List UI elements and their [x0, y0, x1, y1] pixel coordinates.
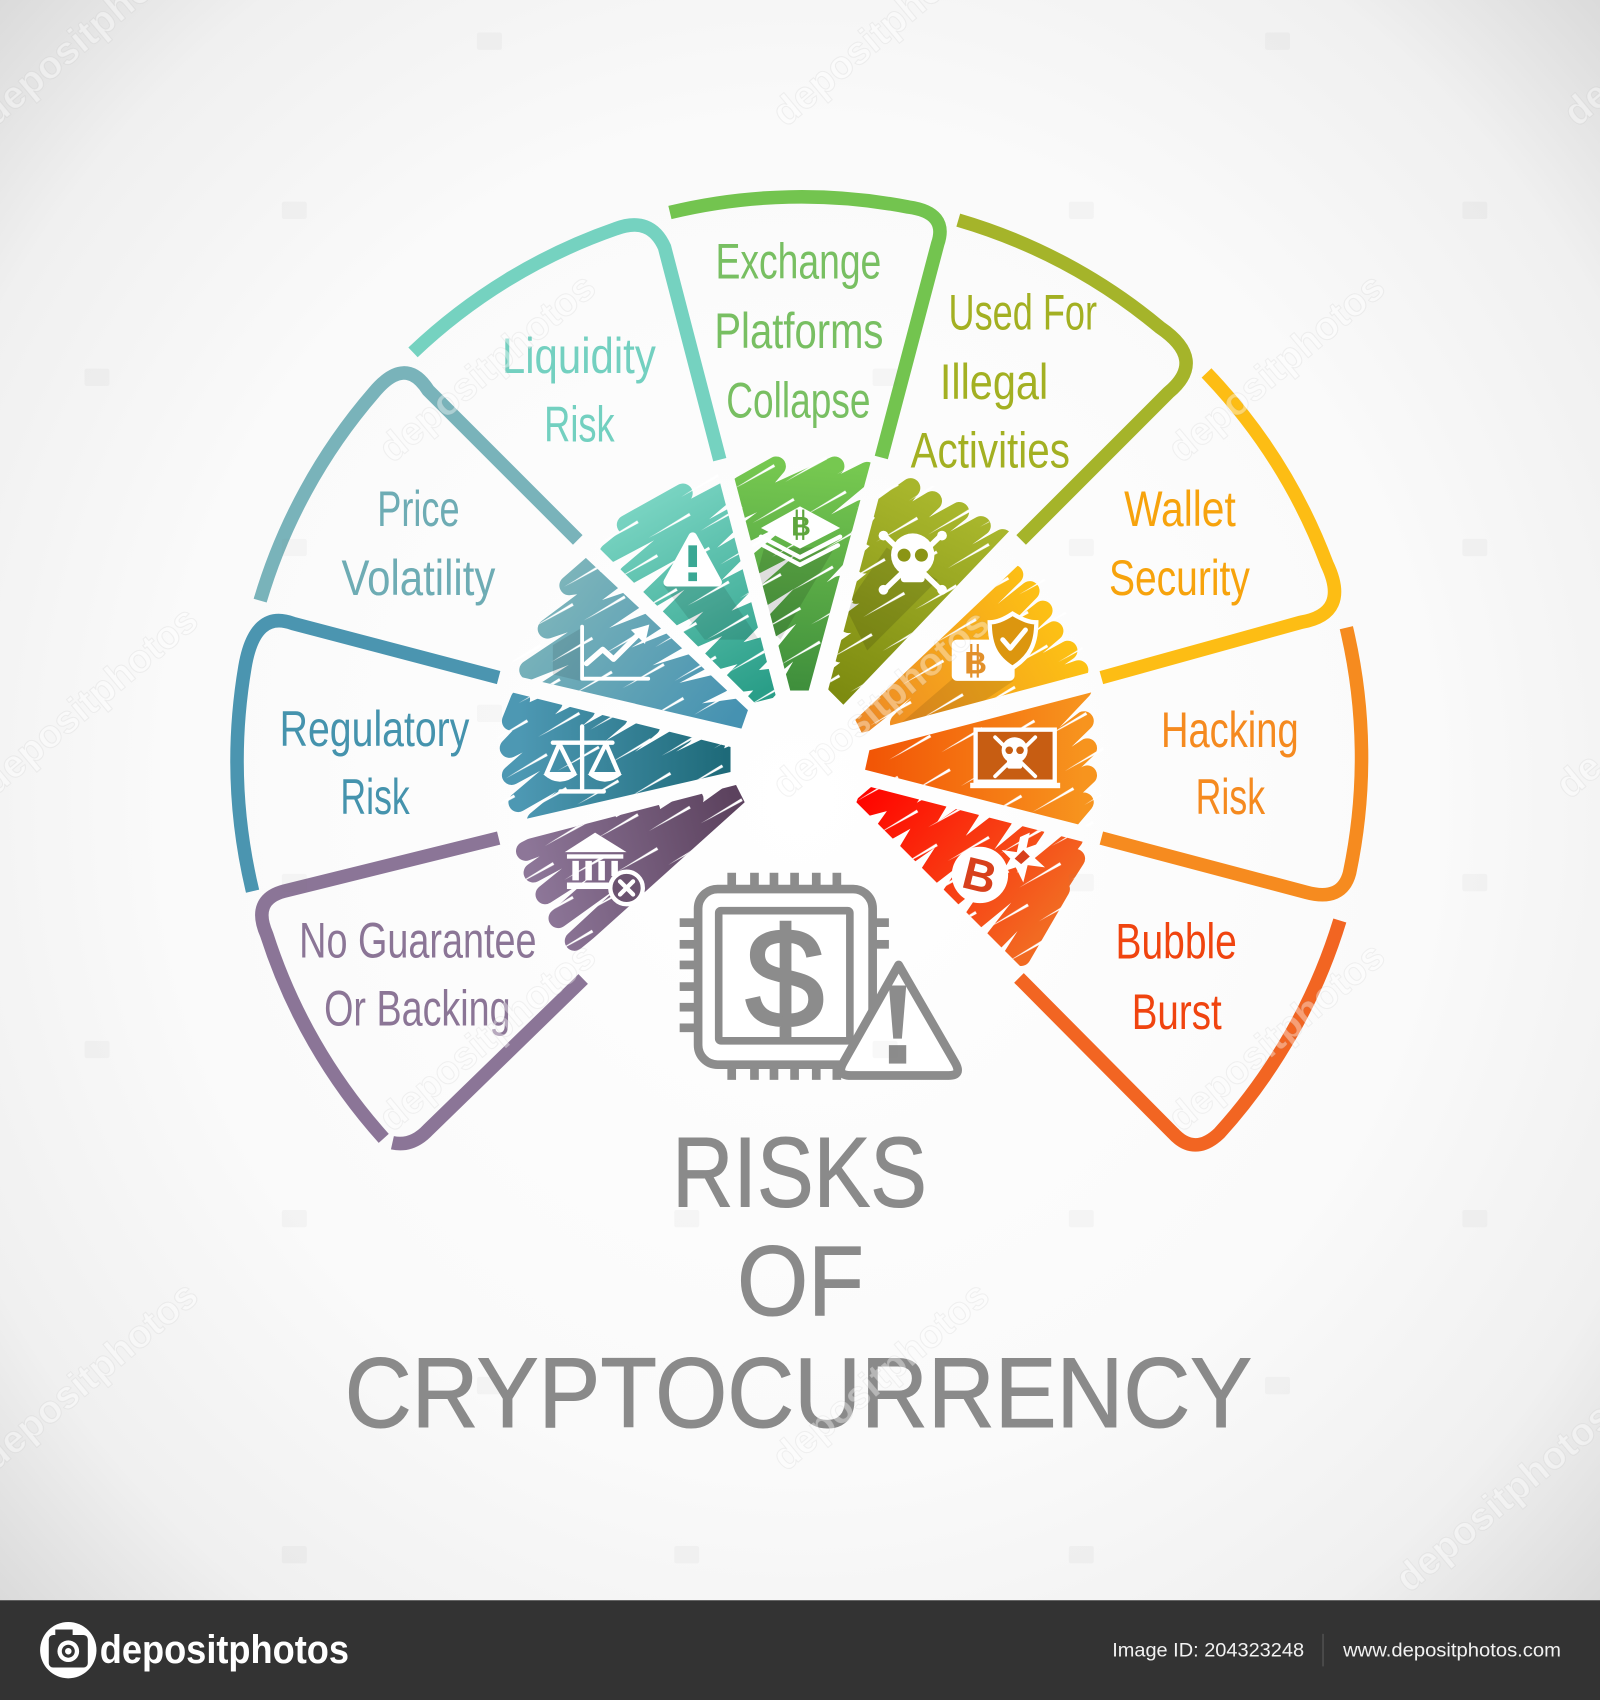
title: OF [737, 1226, 864, 1337]
chip inner screen [719, 911, 850, 1041]
outline: price [260, 373, 578, 601]
panel: wallet security [496, 373, 1335, 1062]
label: wallet security: Wallet [1124, 481, 1236, 537]
panel: bubble burst [496, 455, 1340, 1145]
watermark overlay: depositphotos [371, 265, 604, 471]
title: CRYPTOCURRENCY [345, 1338, 1252, 1449]
watermark overlay: depositphotos [1160, 934, 1393, 1140]
wedge: wallet scribble [855, 566, 1088, 733]
outline: no guarantee [262, 838, 583, 1144]
label: used for illegal activities: Activities [911, 422, 1070, 478]
label: price volatility [341, 481, 495, 606]
outline: hacking [1101, 628, 1362, 895]
label: used for illegal activities: Used For [949, 285, 1097, 341]
watermark overlay: depositphotos [1160, 265, 1393, 471]
wedge: liquidity scribble [600, 483, 776, 702]
footer website: www.depositphotos.com [1342, 1640, 1561, 1662]
label: used for illegal activities [911, 285, 1097, 478]
label: regulatory risk: Risk [340, 769, 410, 825]
wedge: exchange scribble [734, 456, 871, 691]
label: bubble burst: Burst [1132, 984, 1222, 1040]
label: bubble burst: Bubble [1115, 913, 1237, 969]
icon: bitcoin stack [761, 506, 840, 565]
watermark overlay: depositphotos [371, 934, 604, 1140]
outline: wallet [1101, 373, 1335, 678]
panel: exchange platforms collapse [668, 190, 947, 691]
label: liquidity risk: Risk [544, 396, 615, 452]
label: bubble burst [1115, 913, 1237, 1040]
icon: bank with cross [565, 833, 643, 904]
wedge: price scribble [519, 558, 748, 728]
title: RISKS [672, 1118, 927, 1229]
icon: wallet and shield [952, 614, 1036, 681]
label: price volatility: Volatility [341, 550, 495, 606]
panel: used for illegal activities [496, 220, 1186, 1062]
label: no guarantee or backing [299, 912, 537, 1037]
label: price volatility: Price [377, 481, 460, 537]
label: liquidity risk [502, 328, 656, 452]
panel: hacking risk [865, 626, 1368, 902]
icon: skull and crossbones [879, 531, 947, 595]
icon: warning triangle [668, 537, 718, 582]
panel: price volatility [254, 366, 748, 728]
icon: bitcoin stack: B [791, 511, 811, 542]
label: hacking risk: Hacking [1161, 702, 1299, 758]
label: exchange platforms collapse: Collapse [726, 372, 870, 428]
outline: regulatory [237, 621, 499, 891]
central icon: chip with dollar and warning [680, 873, 958, 1080]
wedge: regulatory scribble [500, 692, 731, 819]
outline: liquidity [413, 225, 720, 460]
wedge: bubble scribble [856, 787, 1086, 966]
label: regulatory risk [280, 701, 469, 825]
warning triangle [841, 965, 958, 1076]
panel: regulatory risk [230, 614, 731, 893]
label: liquidity risk: Liquidity [502, 328, 656, 384]
label: no guarantee or backing: Or Backing [324, 981, 511, 1037]
label: hacking risk: Risk [1196, 769, 1265, 825]
outline: illegal activities [958, 220, 1186, 540]
label: regulatory risk: Regulatory [280, 701, 469, 757]
wedge: illegal scribble [828, 478, 1009, 705]
label: wallet security: Security [1109, 550, 1250, 606]
icon: bitcoin bomb: B [958, 847, 1002, 904]
footer image id: Image ID: 204323248 [1112, 1640, 1304, 1662]
wedge: hacking scribble [865, 692, 1097, 824]
label: wallet security [1109, 481, 1250, 606]
label: exchange platforms collapse: Exchange [715, 234, 881, 290]
watermark overlay: depositphotos [764, 1274, 998, 1479]
icon: scales [543, 726, 622, 791]
footer logo icon [40, 1622, 96, 1678]
icon: wallet and shield: B [964, 645, 987, 680]
panel: no guarantee or backing [255, 785, 745, 1150]
footer bar [0, 1600, 1600, 1700]
footer logo text: depositphotos [100, 1628, 349, 1672]
wedge: no guarantee scribble [516, 785, 745, 951]
dollar sign: $ [746, 899, 824, 1057]
icon: laptop with skull [970, 730, 1060, 788]
outline: exchange [670, 197, 940, 458]
label: no guarantee or backing: No Guarantee [299, 912, 537, 968]
icon: bitcoin bomb [952, 833, 1045, 904]
outline: bubble [1019, 920, 1340, 1145]
label: used for illegal activities: Illegal [940, 354, 1048, 410]
chip body [698, 889, 873, 1065]
label: exchange platforms collapse: Platforms [714, 303, 883, 359]
panel: liquidity risk [413, 225, 1104, 1062]
chip pins [680, 873, 889, 1080]
icon: rising chart [582, 624, 649, 679]
label: exchange platforms collapse [714, 234, 883, 428]
label: hacking risk [1161, 702, 1299, 825]
watermark overlay: depositphotos [764, 601, 998, 807]
title [345, 1118, 1252, 1449]
